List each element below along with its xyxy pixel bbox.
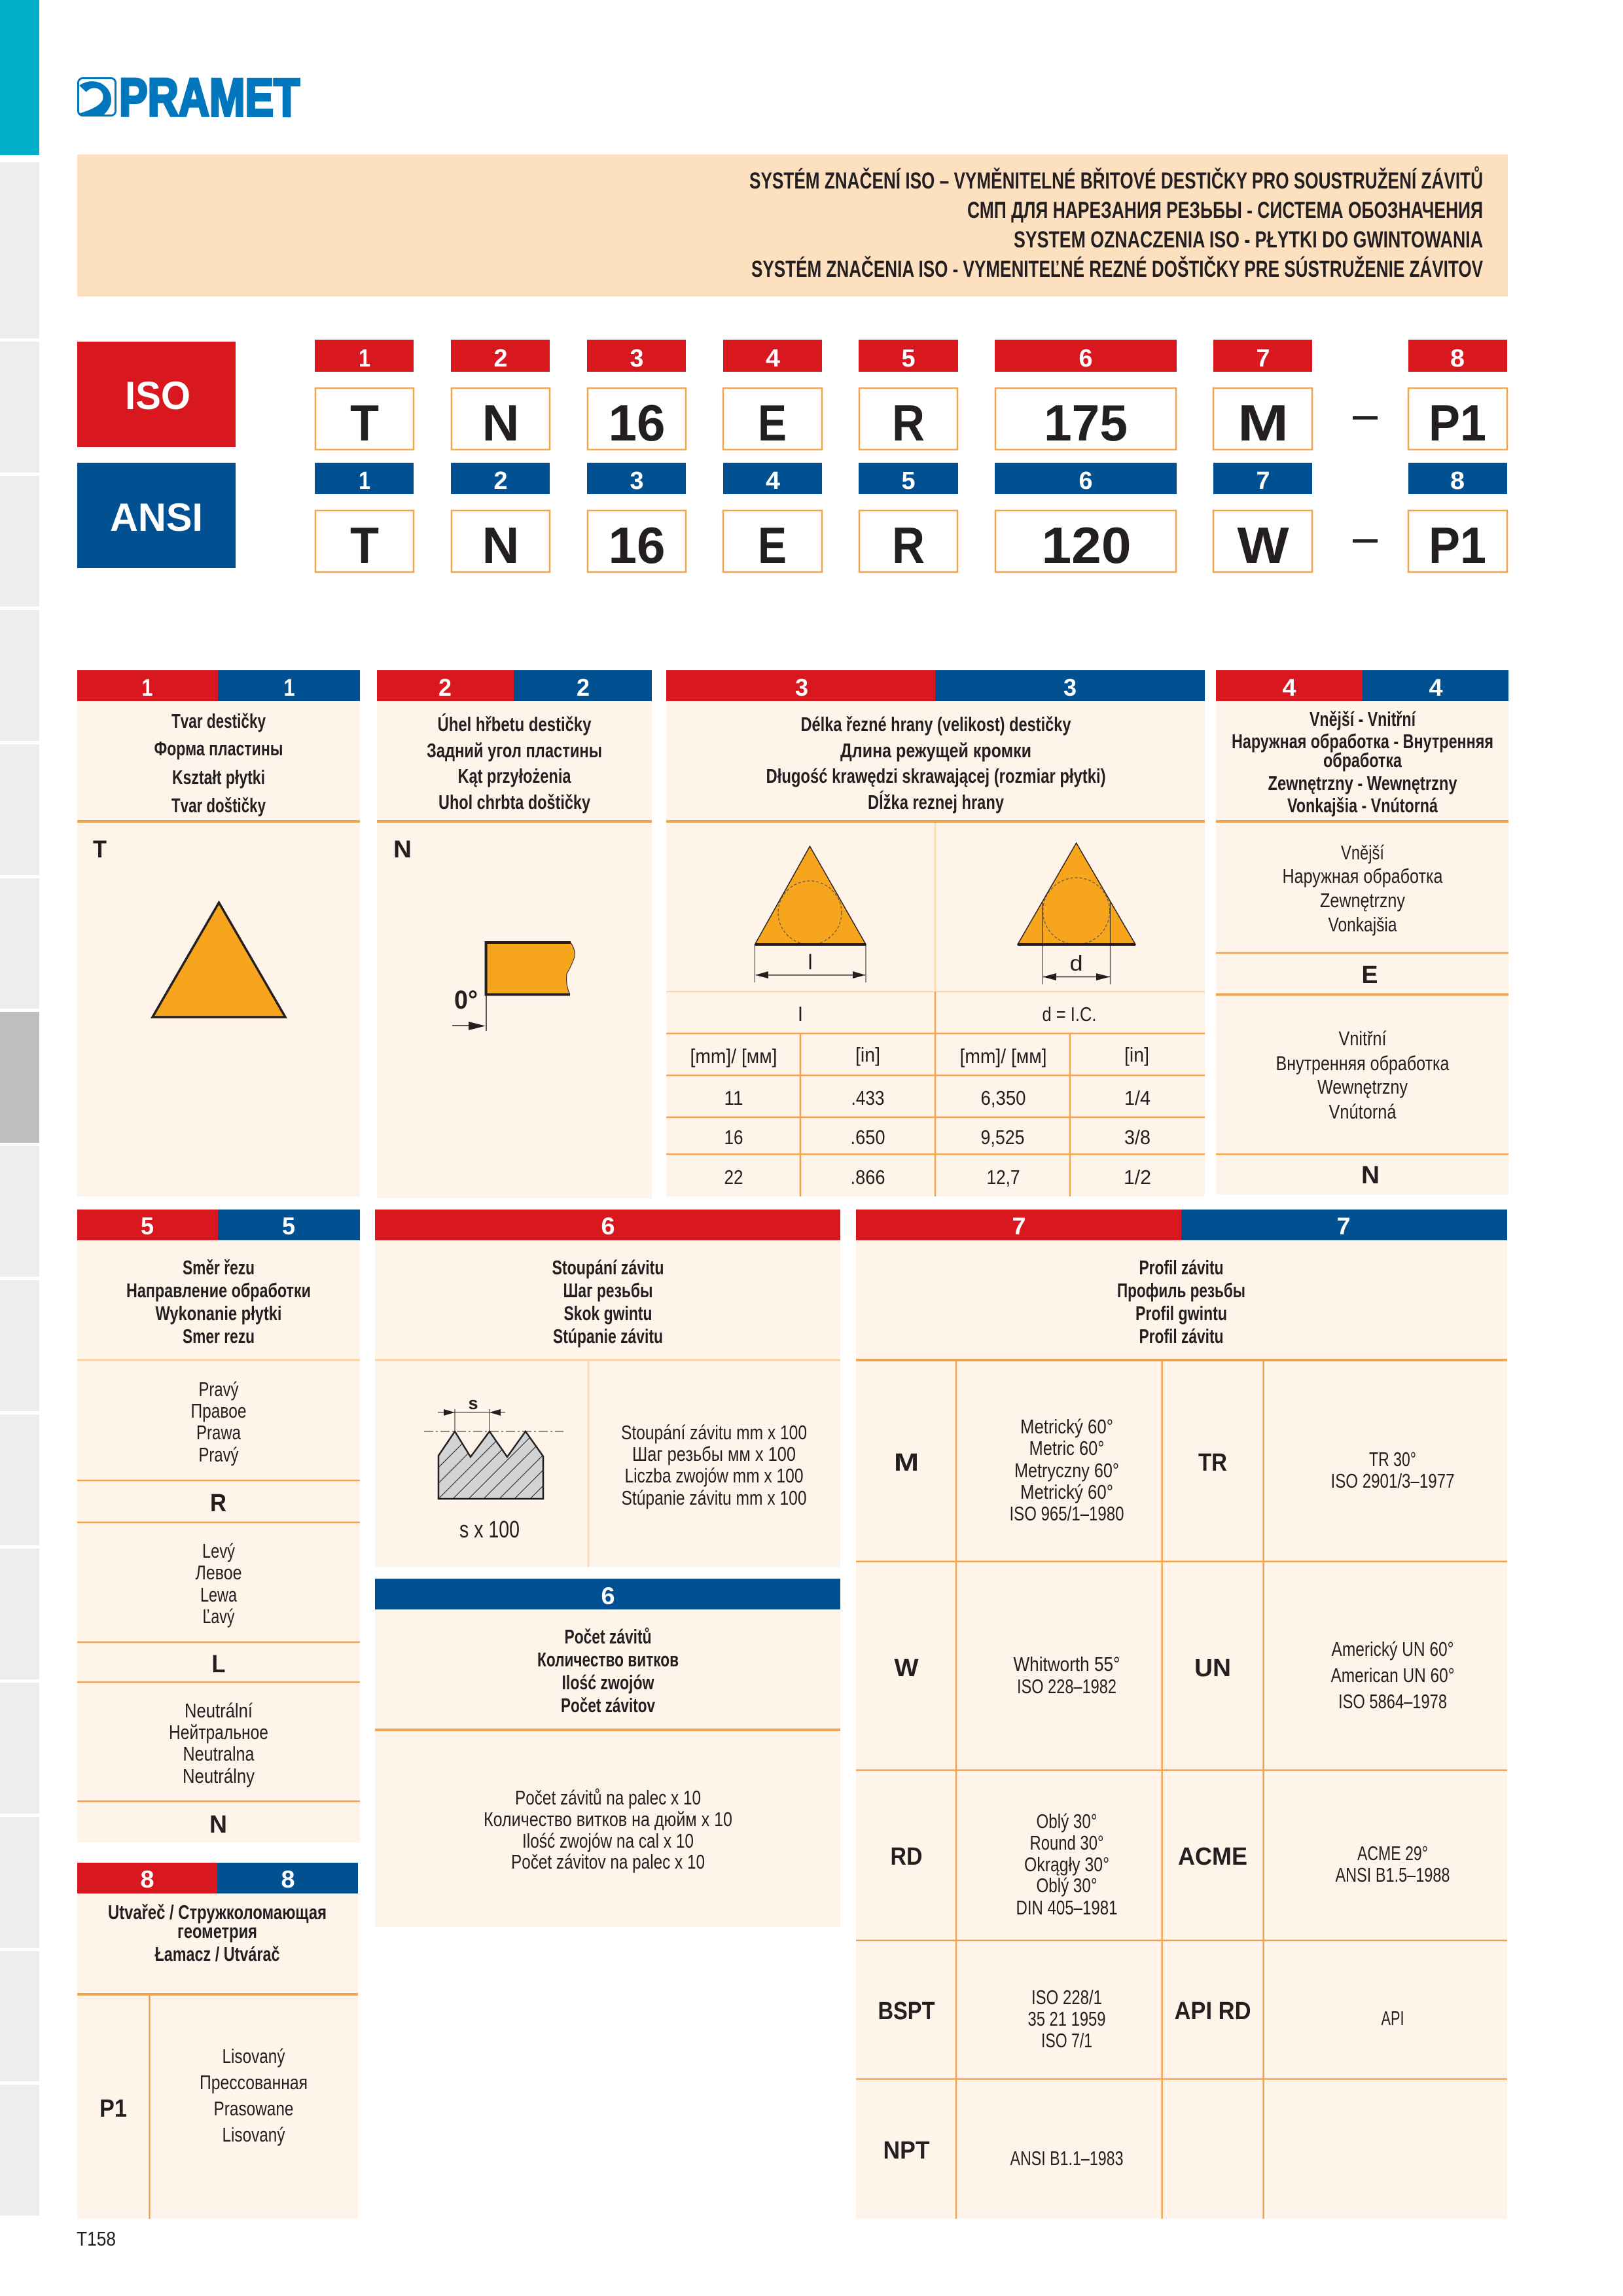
table: insert sizes: 12,7 — [987, 1166, 1020, 1189]
panel 8: chipbreaker: P1 — [99, 2095, 127, 2123]
panel 5: cutting direction: Lewa — [200, 1583, 238, 1606]
row: RD and ACME: DIN 405–1981 — [1016, 1896, 1118, 1919]
panel 7: thread profile table — [856, 1210, 1507, 2219]
panel 3: cutting edge length and table: Dĺžka reznej hrany — [868, 790, 1005, 814]
panel 4: external / internal: Наружная обработка — [1283, 865, 1443, 888]
ANSI code row: 3 — [630, 467, 644, 495]
panel 6 ISO: thread pitch: Шаг резьбы — [563, 1279, 653, 1302]
row: M and TR: TR 30° — [1369, 1448, 1416, 1471]
panel 7: thread profile table: Профиль резьбы — [1117, 1279, 1245, 1302]
panel 6 ANSI: threads per inch: Počet závitov — [561, 1694, 656, 1717]
ANSI code row: 6 — [1079, 467, 1093, 495]
panel 2: clearance angle: Úhel hřbetu destičky — [437, 712, 592, 736]
panel 7: thread profile table: 7 — [1012, 1213, 1026, 1240]
ISO code row: 4 — [766, 345, 780, 372]
panel 6 ISO: thread pitch: Stúpanie závitu mm x 100 — [622, 1486, 806, 1509]
table: insert sizes: 9,525 — [980, 1126, 1025, 1149]
panel 2: clearance angle: Uhol chrbta doštičky — [438, 791, 591, 814]
icon: triangle with l dimension — [755, 846, 866, 982]
panel 3: cutting edge length and table: Délka řezné hrany (velikost) destičky — [801, 713, 1071, 736]
table: insert sizes: .433 — [851, 1086, 885, 1109]
ISO code row: 2 — [493, 345, 508, 372]
panel 6 ISO: thread pitch: 6 — [601, 1213, 615, 1240]
panel 5: cutting direction: Wykonanie płytki — [156, 1302, 281, 1325]
ISO code row: T — [350, 394, 379, 452]
panel 8: chipbreaker: Łamacz / Utvárač — [154, 1943, 280, 1965]
row: W and UN: ISO 5864–1978 — [1338, 1690, 1447, 1713]
ANSI code row: W — [1237, 516, 1289, 574]
panel 5: cutting direction: Левое — [195, 1561, 242, 1584]
panel 7: thread profile table: Profil závitu — [1139, 1325, 1224, 1348]
panel 6 ANSI: threads per inch: Количество витков — [537, 1648, 679, 1671]
row: BSPT and API RD: API — [1381, 2007, 1404, 2030]
panel 6 ANSI: threads per inch: Počet závitů na palec x 10 — [515, 1786, 701, 1809]
panel 5: cutting direction: Направление обработки — [126, 1279, 311, 1302]
panel 6 ISO: thread pitch: Stoupání závitu — [552, 1256, 664, 1279]
row: NPT: NPT — [883, 2137, 929, 2164]
panel 2: clearance angle: 2 — [577, 674, 590, 701]
icon: triangle with d dimension — [1018, 843, 1135, 984]
row: BSPT and API RD: API RD — [1174, 1998, 1251, 2025]
ANSI code row: 16 — [609, 516, 665, 574]
panel 1: insert shape: Kształt płytki — [172, 766, 265, 789]
panel 8: chipbreaker: Прессованная — [200, 2071, 308, 2094]
panel 6 ANSI: threads per inch: Количество витков на дюйм x 10 — [484, 1808, 732, 1831]
row: BSPT and API RD: ISO 7/1 — [1041, 2029, 1092, 2052]
ANSI code row: 4 — [766, 467, 780, 495]
sidebar tabs — [0, 0, 39, 2215]
ISO code row: 3 — [630, 345, 644, 372]
panel 5: cutting direction: 5 — [282, 1213, 295, 1240]
title banner — [77, 154, 1508, 296]
row: NPT — [883, 2137, 1123, 2170]
row: W and UN: Americký UN 60° — [1331, 1638, 1454, 1660]
panel 6 ANSI: threads per inch: Ilość zwojów — [562, 1671, 654, 1694]
ANSI code row: 5 — [902, 467, 915, 495]
ANSI code row: 8 — [1450, 467, 1465, 495]
panel 4: external / internal: Vnější — [1341, 841, 1384, 864]
row: RD and ACME: Round 30° — [1030, 1831, 1103, 1854]
title banner: SYSTEM OZNACZENIA ISO - PŁYTKI DO GWINTOWANIA — [1014, 227, 1483, 253]
row: W and UN — [894, 1638, 1454, 1713]
row: W and UN: American UN 60° — [1331, 1664, 1454, 1687]
ISO code row: ISO — [125, 374, 190, 418]
panel 3: cutting edge length and table: Длина режущей кромки — [840, 739, 1031, 762]
panel 6 ISO: thread pitch: Skok gwintu — [564, 1302, 652, 1325]
ISO code row: R — [892, 394, 925, 452]
row: RD and ACME: Okrągły 30° — [1024, 1853, 1109, 1876]
table: insert sizes: 6,350 — [980, 1086, 1026, 1109]
panel 4: external / internal: Vnútorná — [1329, 1100, 1397, 1123]
panel 1: insert shape: Форма пластины — [154, 737, 283, 760]
icon: 0 degree clearance profile — [452, 942, 575, 1031]
row: W and UN: UN — [1194, 1655, 1231, 1682]
ANSI code row: T — [350, 516, 379, 574]
panel 5: cutting direction: Prawa — [196, 1421, 241, 1444]
ISO code row: 1 — [359, 345, 370, 372]
panel 5: cutting direction: Pravý — [199, 1443, 239, 1466]
row: M and TR: Metrický 60° — [1020, 1480, 1113, 1503]
panel 7: thread profile table: Profil gwintu — [1135, 1302, 1227, 1325]
panel 2: clearance angle: Задний угол пластины — [427, 739, 602, 762]
panel 4: external / internal: 4 — [1429, 674, 1443, 701]
panel 5: cutting direction: Правое — [191, 1399, 246, 1422]
panel 4: external / internal: Vnější - Vnitřní — [1310, 708, 1416, 730]
panel 5: cutting direction — [77, 1210, 360, 1842]
row: BSPT and API RD: BSPT — [878, 1998, 935, 2025]
icon: thread profile: s — [468, 1393, 478, 1413]
ISO code row: 16 — [609, 394, 665, 452]
table: insert sizes: .866 — [851, 1166, 885, 1189]
row: M and TR: ISO 965/1–1980 — [1009, 1502, 1124, 1525]
panel 4: external / internal: E — [1361, 961, 1378, 989]
ISO code row: 5 — [902, 345, 915, 372]
panel 5: cutting direction: Směr řezu — [183, 1256, 255, 1279]
panel 5: cutting direction: Pravý — [199, 1378, 239, 1401]
panel 8: chipbreaker: Utvařeč / Стружколомающая — [108, 1901, 327, 1924]
logo: Pramet: PRAMET — [119, 68, 300, 128]
panel 8: chipbreaker: Lisovaný — [223, 2123, 285, 2146]
panel 1: insert shape: 1 — [284, 674, 294, 701]
row: BSPT and API RD: ISO 228/1 — [1031, 1986, 1102, 2009]
icon: triangle with d dimension: d — [1070, 951, 1083, 975]
panel 3: cutting edge length and table: Długość krawędzi skrawającej (rozmiar płytki) — [766, 764, 1106, 787]
panel 6 ANSI: threads per inch — [375, 1579, 840, 1927]
row: W and UN: ISO 228–1982 — [1017, 1675, 1116, 1698]
panel 6 ANSI: threads per inch: 6 — [601, 1583, 615, 1609]
row: M and TR — [894, 1415, 1454, 1525]
ANSI code row: 2 — [493, 467, 508, 495]
panel 2: clearance angle: N — [393, 836, 412, 863]
panel 8: chipbreaker: 8 — [140, 1866, 154, 1893]
panel 8: chipbreaker: Lisovaný — [223, 2045, 285, 2068]
panel 4: external / internal: 4 — [1283, 674, 1296, 701]
panel 6 ISO: thread pitch — [375, 1210, 840, 1567]
panel 4: external / internal: обработка — [1323, 749, 1402, 772]
panel 1: insert shape: Tvar doštičky — [171, 794, 266, 817]
panel 2: clearance angle: 2 — [438, 674, 452, 701]
panel 6 ISO: thread pitch: Stúpanie závitu — [553, 1325, 663, 1348]
row: BSPT and API RD: 35 21 1959 — [1027, 2007, 1106, 2030]
table: insert sizes: [mm]/ [мм] — [690, 1045, 777, 1067]
row: M and TR: Metryczny 60° — [1014, 1459, 1119, 1482]
table: insert sizes: d = I.C. — [1042, 1003, 1097, 1026]
ANSI code row: 1 — [359, 467, 370, 495]
panel 5: cutting direction: Levý — [202, 1539, 235, 1562]
table: insert sizes: 1/4 — [1124, 1086, 1150, 1109]
ISO code row: P1 — [1429, 394, 1486, 452]
table: insert sizes: 3/8 — [1124, 1126, 1150, 1149]
panel 6 ISO: thread pitch: s x 100 — [459, 1516, 520, 1543]
panel 4: external / internal: Zewnętrzny - Wewnętrzny — [1268, 772, 1457, 795]
panel 3: cutting edge length and table — [666, 670, 1205, 1196]
row: RD and ACME: ACME 29° — [1357, 1842, 1428, 1865]
panel 4: external / internal: Wewnętrzny — [1317, 1075, 1408, 1098]
table: insert sizes: [in] — [855, 1043, 880, 1066]
panel 4: external / internal: Zewnętrzny — [1320, 889, 1405, 912]
panel 5: cutting direction: Neutralna — [183, 1742, 255, 1765]
ANSI code row: N — [482, 516, 520, 574]
panel 8: chipbreaker: геометрия — [177, 1920, 257, 1943]
panel 4: external / internal: Vonkajšia — [1329, 913, 1397, 936]
ISO code row: 8 — [1450, 345, 1465, 372]
ISO code row: M — [1238, 394, 1289, 452]
panel 1: insert shape: T — [93, 836, 107, 863]
row: RD and ACME: ACME — [1178, 1843, 1247, 1871]
row: M and TR: Metrický 60° — [1020, 1415, 1113, 1438]
ISO code row: E — [758, 394, 787, 452]
ISO code row: N — [482, 394, 520, 452]
ANSI code row — [77, 463, 1507, 574]
row: NPT: ANSI B1.1–1983 — [1010, 2147, 1123, 2170]
ANSI code row: 7 — [1257, 467, 1270, 495]
panel 4: external / internal: Vnitřní — [1339, 1027, 1387, 1050]
panel 5: cutting direction: Ľavý — [203, 1605, 235, 1628]
row: RD and ACME: ANSI B1.5–1988 — [1335, 1863, 1450, 1886]
table: insert sizes: [in] — [1124, 1043, 1149, 1066]
panel 6 ANSI: threads per inch: Počet závitů — [564, 1625, 652, 1648]
panel 5: cutting direction: Нейтральное — [169, 1721, 268, 1744]
panel 5: cutting direction: L — [212, 1651, 225, 1678]
table: insert sizes: l — [798, 1003, 802, 1026]
panel 5: cutting direction: Smer rezu — [183, 1325, 255, 1348]
icon: triangle with l dimension: l — [808, 950, 813, 974]
panel 3: cutting edge length and table: 3 — [795, 674, 808, 701]
panel 6 ISO: thread pitch: Шаг резьбы мм x 100 — [632, 1443, 796, 1465]
ANSI code row: ANSI — [110, 495, 203, 539]
panel 6 ISO: thread pitch: Stoupání závitu mm x 100 — [621, 1421, 807, 1444]
logo: Pramet — [79, 68, 300, 128]
row: RD and ACME: Oblý 30° — [1037, 1810, 1097, 1833]
icon: 0 degree clearance profile: 0° — [454, 986, 478, 1014]
row: RD and ACME: Oblý 30° — [1037, 1874, 1097, 1897]
panel 8: chipbreaker — [77, 1863, 358, 2219]
row: M and TR: Metric 60° — [1029, 1437, 1105, 1460]
row: M and TR: ISO 2901/3–1977 — [1331, 1469, 1454, 1492]
panel 7: thread profile table: Profil závitu — [1139, 1256, 1224, 1279]
ANSI code row: 120 — [1042, 516, 1131, 574]
panel 4: external / internal: Внутренняя обработка — [1276, 1052, 1450, 1075]
row: W and UN: Whitworth 55° — [1013, 1653, 1120, 1676]
row: M and TR: M — [894, 1449, 919, 1477]
panel 1: insert shape: Tvar destičky — [171, 709, 266, 732]
table: insert sizes: 16 — [724, 1126, 743, 1149]
table: insert sizes: .650 — [851, 1126, 885, 1149]
panel 1: insert shape: 1 — [141, 674, 153, 701]
panel 2: clearance angle: Kąt przyłożenia — [458, 764, 571, 787]
icon: triangular insert — [152, 903, 285, 1017]
panel 8: chipbreaker: Prasowane — [213, 2097, 293, 2120]
row: BSPT and API RD — [878, 1986, 1404, 2052]
ANSI code row: R — [892, 516, 925, 574]
page number: T158 — [77, 2227, 116, 2250]
panel 5: cutting direction: N — [209, 1811, 227, 1839]
ISO code row — [77, 340, 1507, 452]
panel 4: external / internal: N — [1361, 1162, 1380, 1189]
panel 4: external / internal: Vonkajšia - Vnútorná — [1287, 794, 1438, 817]
panel 5: cutting direction: R — [210, 1490, 226, 1517]
ANSI code row: E — [758, 516, 787, 574]
table: insert sizes: 11 — [724, 1086, 743, 1109]
table: insert sizes: 1/2 — [1124, 1166, 1151, 1189]
ISO code row: 7 — [1257, 345, 1270, 372]
panel 3: cutting edge length and table: 3 — [1063, 674, 1077, 701]
row: RD and ACME — [890, 1810, 1450, 1919]
panel 1: insert shape — [77, 670, 360, 1196]
row: RD and ACME: RD — [890, 1843, 923, 1871]
panel 5: cutting direction: Neutrální — [185, 1699, 253, 1722]
table: insert sizes — [666, 992, 1205, 1196]
panel 2: clearance angle — [377, 670, 652, 1198]
ISO code row: 6 — [1079, 345, 1093, 372]
panel 5: cutting direction: Neutrálny — [183, 1765, 255, 1787]
table: insert sizes: [mm]/ [мм] — [959, 1045, 1047, 1067]
panel 6 ANSI: threads per inch: Ilość zwojów na cal x 10 — [522, 1829, 694, 1852]
row: M and TR: TR — [1198, 1449, 1227, 1477]
panel 6 ISO: thread pitch: Liczba zwojów mm x 100 — [624, 1464, 804, 1487]
row: W and UN: W — [894, 1655, 919, 1682]
panel 4: external / internal — [1216, 670, 1508, 1194]
ANSI code row: P1 — [1429, 516, 1486, 574]
ISO code row: 175 — [1044, 394, 1128, 452]
table: insert sizes: 22 — [724, 1166, 743, 1189]
panel 8: chipbreaker: 8 — [281, 1866, 294, 1893]
panel 6 ANSI: threads per inch: Počet závitov na palec x 10 — [511, 1850, 705, 1873]
panel 5: cutting direction: 5 — [141, 1213, 154, 1240]
icon: thread profile — [424, 1399, 563, 1500]
panel 4: external / internal: Наружная обработка - Внутренняя — [1232, 730, 1493, 753]
panel 7: thread profile table: 7 — [1336, 1213, 1351, 1240]
